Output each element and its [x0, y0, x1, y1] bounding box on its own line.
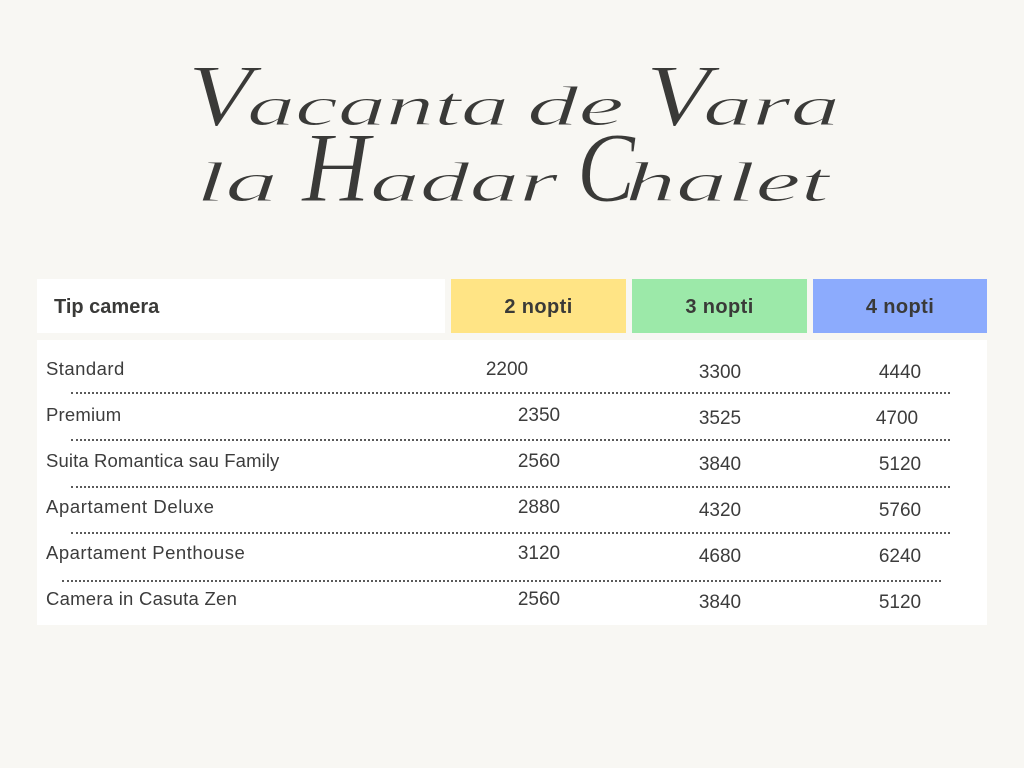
row: Apartament Penthouse: 6240 [879, 546, 921, 567]
title: V [646, 48, 721, 145]
title: de [527, 76, 624, 138]
row: Apartament Deluxe: Apartament Deluxe [46, 496, 215, 517]
header: 4 nights: 4 nopti [866, 296, 934, 318]
header: room type: Tip camera [54, 296, 159, 318]
header: 3 nights: 3 nopti [685, 296, 754, 318]
price table [37, 340, 987, 625]
row: Camera in Casuta Zen: 5120 [879, 592, 921, 613]
row: Suita Romantica sau Family [46, 450, 921, 475]
row: Standard: Standard [46, 358, 125, 379]
row: Standard: 3300 [699, 362, 741, 383]
row: Standard: 4440 [879, 362, 921, 383]
row: Premium: Premium [46, 404, 121, 425]
title: acanta [247, 76, 509, 138]
row: Apartament Deluxe: 4320 [699, 500, 741, 521]
row: Premium [46, 404, 918, 429]
row: Camera in Casuta Zen [46, 588, 921, 613]
row: Apartament Deluxe: 2880 [518, 497, 560, 518]
row: Standard [46, 358, 921, 383]
row: Apartament Deluxe [46, 496, 921, 521]
title: H [300, 112, 375, 223]
title: la [196, 152, 278, 214]
row: Premium: 4700 [876, 408, 918, 429]
title: C [577, 112, 636, 223]
row: Standard: 2200 [486, 359, 528, 380]
title: ara [703, 76, 840, 138]
row: Apartament Penthouse: Apartament Penthouse [46, 542, 245, 563]
header: room type [37, 279, 445, 333]
row: Suita Romantica sau Family: 5120 [879, 454, 921, 475]
row: Suita Romantica sau Family: Suita Romantica sau Family [46, 450, 279, 471]
row: Apartament Penthouse: 4680 [699, 546, 741, 567]
title: adar [370, 152, 558, 214]
title: V [188, 48, 263, 145]
row: Camera in Casuta Zen: 2560 [518, 589, 560, 610]
header: 2 nights [451, 279, 626, 333]
row: Apartament Deluxe: 5760 [879, 500, 921, 521]
header: 4 nights [813, 279, 987, 333]
row: Camera in Casuta Zen: Camera in Casuta Zen [46, 588, 237, 609]
row: Apartament Penthouse [46, 542, 921, 567]
row: Premium: 2350 [518, 405, 560, 426]
header: 3 nights [632, 279, 807, 333]
row: Suita Romantica sau Family: 2560 [518, 451, 560, 472]
title [188, 48, 840, 223]
row: Camera in Casuta Zen: 3840 [699, 592, 741, 613]
row: Apartament Penthouse: 3120 [518, 543, 560, 564]
row: Premium: 3525 [699, 408, 741, 429]
header: 2 nights: 2 nopti [504, 296, 573, 318]
title: halet [625, 152, 832, 214]
row: Suita Romantica sau Family: 3840 [699, 454, 741, 475]
